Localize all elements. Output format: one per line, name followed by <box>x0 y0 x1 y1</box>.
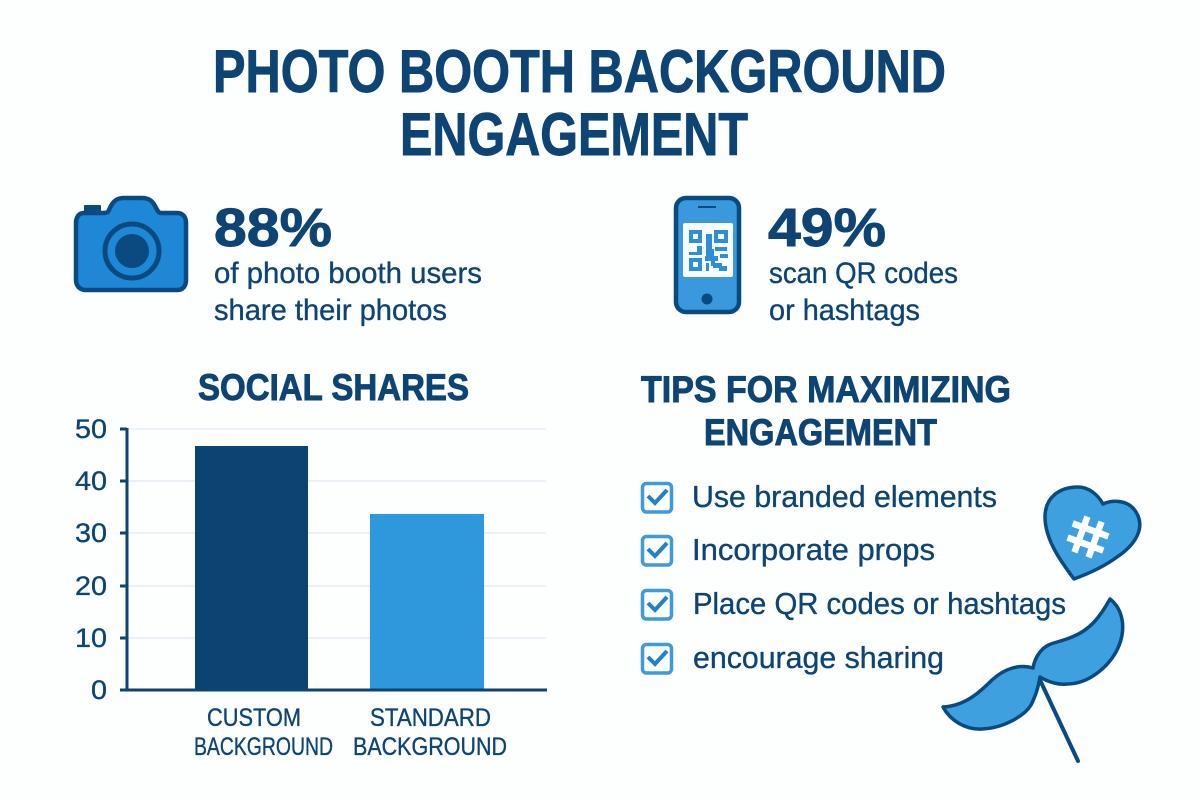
title <box>213 38 946 168</box>
bar chart: social shares: 20 <box>75 571 107 601</box>
tip: props: Incorporate props <box>692 532 935 567</box>
stat: 49 percent: 49% <box>768 198 886 258</box>
tip: encourage sharing: encourage sharing <box>693 640 944 675</box>
bar chart: social shares: CUSTOM <box>207 704 301 732</box>
tips list <box>642 479 1066 675</box>
stat: 88 percent <box>214 198 482 327</box>
heading: tips <box>641 369 1011 453</box>
bar chart: social shares: 0 <box>91 675 107 705</box>
stat: 49 percent: scan QR codes <box>769 257 958 290</box>
stat: 88 percent: share their photos <box>214 294 447 327</box>
bar chart: social shares: 30 <box>75 518 107 548</box>
bar: custom background <box>195 446 308 690</box>
bar chart: social shares <box>75 414 547 761</box>
icon: heart with hashtag <box>1045 487 1140 579</box>
bar chart: social shares: STANDARD <box>370 704 491 732</box>
heading: social shares: SOCIAL SHARES <box>198 367 469 408</box>
stat: 88 percent: of photo booth users <box>214 257 482 290</box>
bar chart: social shares: BACKGROUND <box>353 733 507 761</box>
bar chart: social shares: 50 <box>75 414 107 444</box>
title: ENGAGEMENT <box>400 101 748 168</box>
bar chart: social shares: 10 <box>75 623 107 653</box>
title: PHOTO BOOTH BACKGROUND <box>213 38 946 105</box>
heading: tips: ENGAGEMENT <box>704 412 937 453</box>
heading: tips: TIPS FOR MAXIMIZING <box>641 369 1011 410</box>
bar chart: social shares: 40 <box>75 466 107 496</box>
icon: mustache prop <box>943 599 1123 761</box>
tip: branded elements: Use branded elements <box>692 479 997 514</box>
tip: QR codes or hashtags: Place QR codes or hashtags <box>693 586 1066 621</box>
stat: 88 percent: 88% <box>214 198 332 258</box>
bar chart: social shares: BACKGROUND <box>194 733 333 761</box>
bar: standard background <box>370 514 484 690</box>
stat: 49 percent: or hashtags <box>769 294 920 327</box>
stat: 49 percent <box>768 198 958 327</box>
icon: phone with QR code <box>676 198 739 312</box>
icon: camera <box>76 198 186 290</box>
